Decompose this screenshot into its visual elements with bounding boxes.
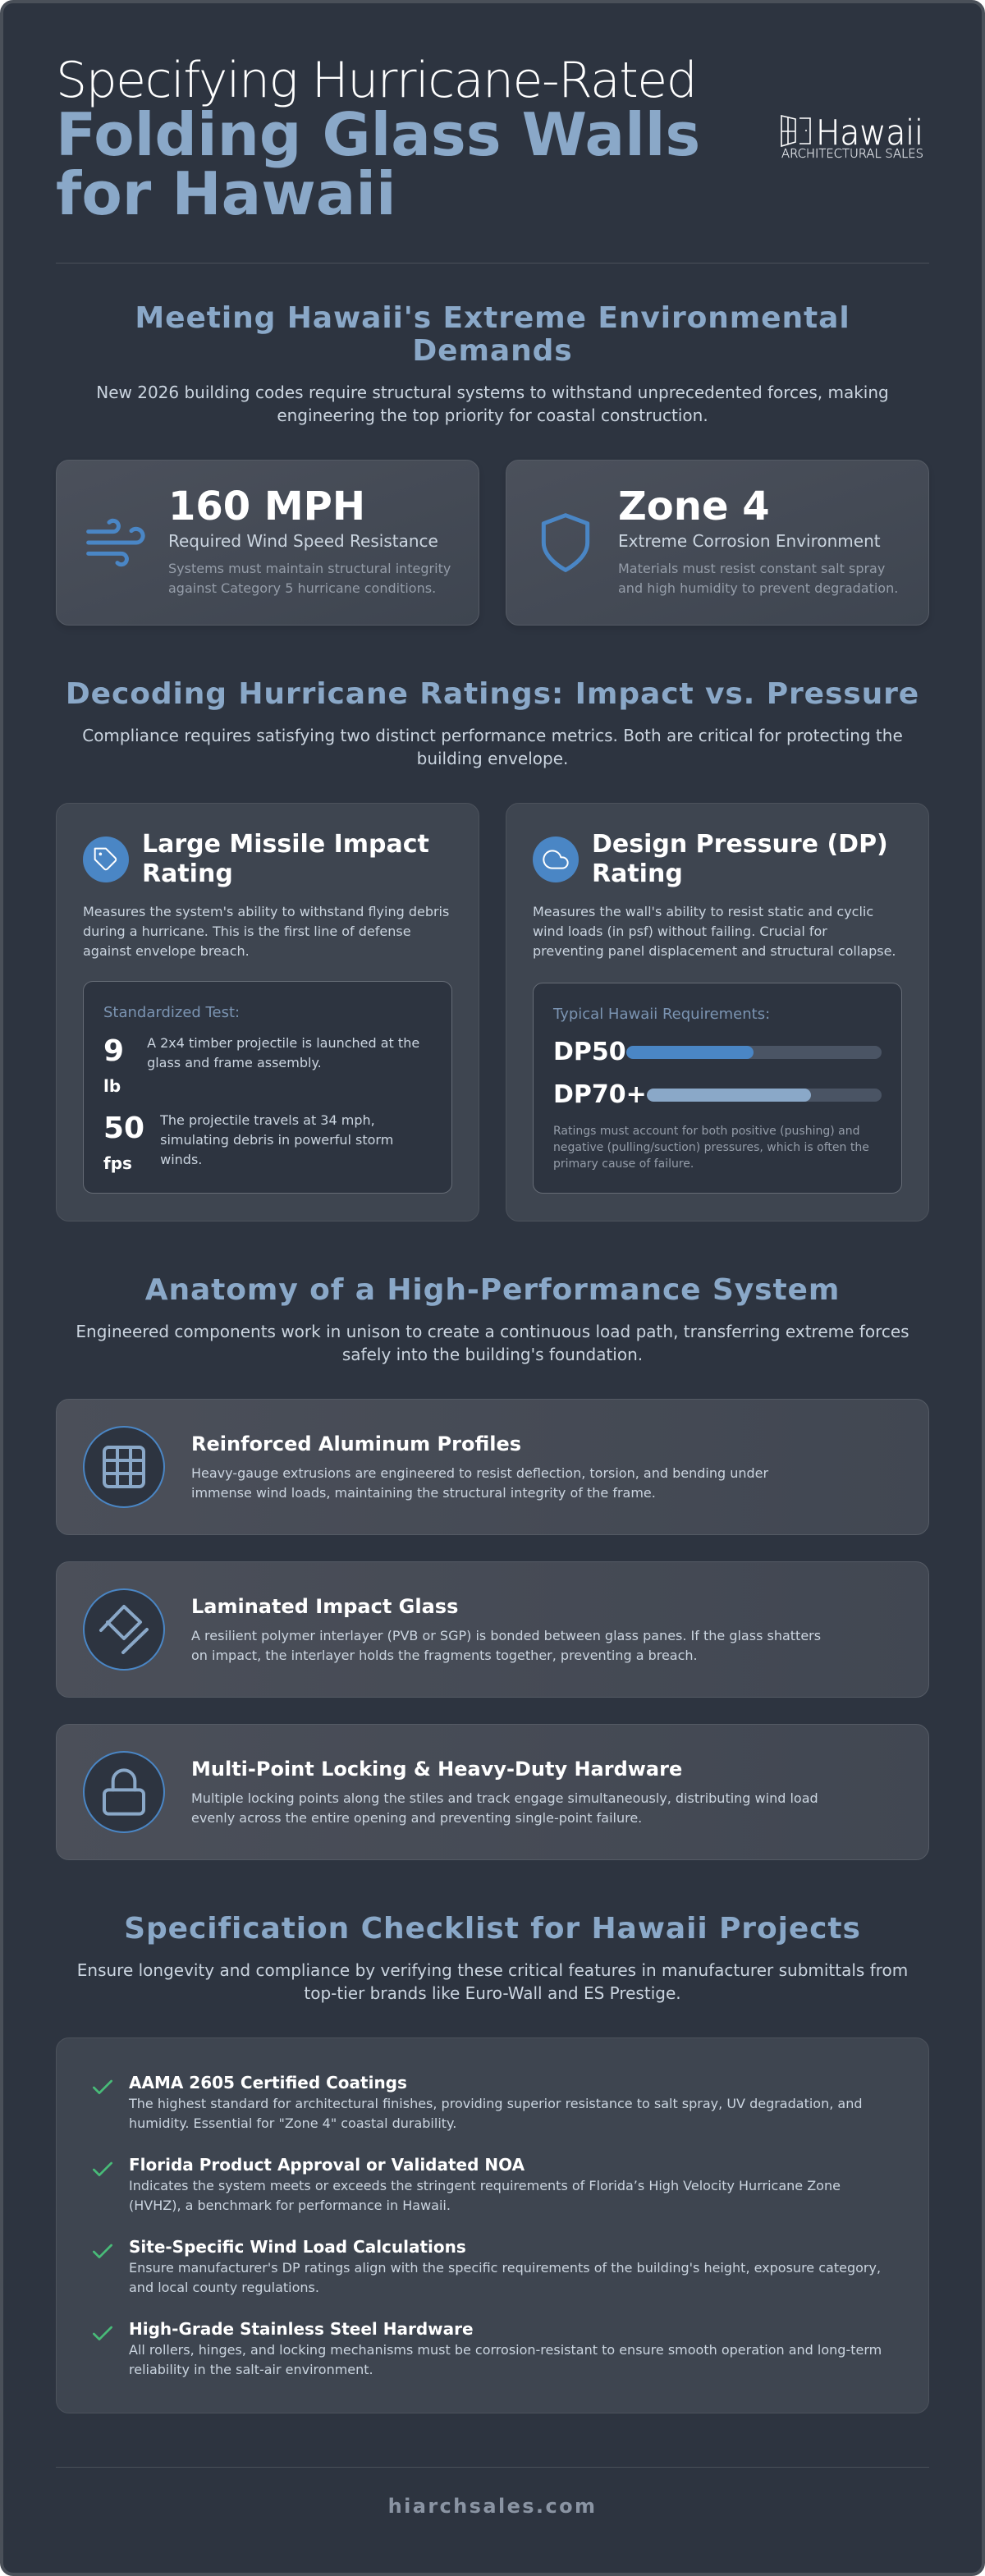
panel: aluminum profiles xyxy=(56,1399,929,1535)
section: anatomy xyxy=(56,1273,929,1860)
panel: Zone 4 xyxy=(506,460,929,626)
stat text: and high humidity to prevent degradation. xyxy=(618,580,898,596)
card heading: Rating xyxy=(142,859,233,888)
panel: 160 MPH xyxy=(56,460,479,626)
checklist item: coatings: AAMA 2605 Certified Coatings xyxy=(129,2073,407,2092)
stat: 9 lb: 9 xyxy=(103,1034,124,1068)
icon: wind xyxy=(86,519,145,566)
standardized test box xyxy=(83,981,452,1194)
heading: Demands xyxy=(412,334,573,368)
checklist item: hardware: reliability in the salt-air environment. xyxy=(129,2362,373,2377)
description: Measures the system's ability to withstand flying debris xyxy=(83,904,449,919)
intro text: New 2026 building codes require structural systems to withstand unprecedented forces, making xyxy=(96,383,889,402)
item text: Laminated Impact Glass xyxy=(191,1595,458,1618)
standardized test box: Standardized Test: xyxy=(103,1004,240,1021)
description: against envelope breach. xyxy=(83,943,250,959)
stat text: against Category 5 hurricane conditions. xyxy=(168,580,436,596)
item text xyxy=(191,1595,821,1663)
title xyxy=(56,52,700,228)
checklist item: coatings xyxy=(93,2073,862,2131)
stat text xyxy=(618,484,898,596)
panel: checklist xyxy=(56,2037,929,2413)
checklist item: coatings: humidity. Essential for "Zone 4" coastal durability. xyxy=(129,2115,456,2131)
bar: DP50 xyxy=(553,1038,882,1066)
item text: evenly across the entire opening and preventing single-point failure. xyxy=(191,1810,642,1826)
heading: Decoding Hurricane Ratings: Impact vs. Pressure xyxy=(66,677,919,711)
panel: locking hardware xyxy=(56,1724,929,1860)
intro text: engineering the top priority for coastal construction. xyxy=(277,406,708,425)
header xyxy=(56,52,923,228)
intro text xyxy=(77,1960,908,2003)
logo: Hawaii Architectural Sales: ARCHITECTURAL SALES xyxy=(781,146,923,161)
checklist item: wind load: and local county regulations. xyxy=(129,2280,319,2295)
stat: 9 lb: glass and frame assembly. xyxy=(147,1055,322,1070)
checklist item: hardware: All rollers, hinges, and locking mechanisms must be corrosion-resistant to ensure smooth operation and long-term xyxy=(129,2342,882,2358)
intro text: top-tier brands like Euro-Wall and ES Prestige. xyxy=(304,1983,681,2003)
item text: Multi-Point Locking & Heavy-Duty Hardware xyxy=(191,1758,682,1781)
heading: Specification Checklist for Hawaii Projects xyxy=(124,1912,861,1946)
stat text: Zone 4 xyxy=(618,484,770,529)
intro text: building envelope. xyxy=(417,749,568,768)
item text: A resilient polymer interlayer (PVB or SGP) is bonded between glass panes. If the glass shatters xyxy=(191,1628,821,1643)
stat text: 160 MPH xyxy=(168,484,365,529)
stat: 50 fps xyxy=(103,1112,393,1173)
heading xyxy=(135,301,850,368)
intro text xyxy=(82,726,903,768)
intro text: Ensure longevity and compliance by verifying these critical features in manufacturer submittals from xyxy=(77,1960,908,1980)
checklist item: coatings: The highest standard for architectural finishes, providing superior resistance to salt spray, UV degradation, and xyxy=(129,2096,862,2111)
item text: Reinforced Aluminum Profiles xyxy=(191,1432,521,1455)
intro text xyxy=(76,1322,909,1364)
requirements box: Typical Hawaii Requirements: xyxy=(553,1006,770,1023)
heading: Anatomy of a High-Performance System xyxy=(145,1273,840,1307)
item text: Multiple locking points along the stiles and track engage simultaneously, distributing wind load xyxy=(191,1790,818,1806)
item text: Heavy-gauge extrusions are engineered to resist deflection, torsion, and bending under xyxy=(191,1465,768,1481)
description: preventing panel displacement and structural collapse. xyxy=(533,943,896,959)
description xyxy=(83,904,449,959)
panel: design pressure xyxy=(506,803,929,1222)
checklist item: wind load: Ensure manufacturer's DP ratings align with the specific requirements of the building's height, exposure category, xyxy=(129,2260,881,2276)
heading: Meeting Hawaii's Extreme Environmental xyxy=(135,301,850,335)
checklist item: wind load: Site-Specific Wind Load Calculations xyxy=(129,2237,466,2257)
panel: large missile impact xyxy=(56,803,479,1222)
section: hurricane ratings xyxy=(56,677,929,1222)
footer website: hiarchsales.com xyxy=(388,2495,597,2518)
card heading: Large Missile Impact xyxy=(142,830,429,859)
note: Ratings must account for both positive (pushing) and xyxy=(553,1125,859,1138)
note: negative (pulling/suction) pressures, which is often the xyxy=(553,1141,869,1154)
title: Folding Glass Walls xyxy=(56,100,700,169)
checklist item: hardware: High-Grade Stainless Steel Hardware xyxy=(129,2319,474,2339)
card heading: Design Pressure (DP) xyxy=(592,830,888,859)
icon: cloud xyxy=(533,837,579,882)
intro text: Engineered components work in unison to create a continuous load path, transferring extreme forces xyxy=(76,1322,909,1341)
stat: 9 lb: A 2x4 timber projectile is launched at the xyxy=(147,1035,419,1051)
stat text xyxy=(168,484,451,596)
stat text: Systems must maintain structural integrity xyxy=(168,561,451,576)
section: environmental demands xyxy=(56,301,929,626)
note xyxy=(553,1125,869,1171)
description: Measures the wall's ability to resist static and cyclic xyxy=(533,904,873,919)
bar: DP50: DP50 xyxy=(553,1038,626,1066)
description: wind loads (in psf) without failing. Crucial for xyxy=(533,924,827,939)
description: during a hurricane. This is the first line of defense xyxy=(83,924,411,939)
description xyxy=(533,904,896,959)
checklist item: Florida approval: Indicates the system meets or exceeds the stringent requirements of Florida’s High Velocity Hurricane Zone xyxy=(129,2178,841,2193)
item text xyxy=(191,1432,768,1501)
icon: grid xyxy=(83,1426,165,1508)
stat: 9 lb xyxy=(103,1034,419,1096)
icon: tag xyxy=(83,837,129,882)
stat: 50 fps: simulating debris in powerful storm xyxy=(160,1132,393,1148)
item text: on impact, the interlayer holds the fragments together, preventing a breach. xyxy=(191,1648,698,1663)
note: primary cause of failure. xyxy=(553,1157,694,1171)
stat: 50 fps: fps xyxy=(103,1153,132,1173)
item text xyxy=(191,1758,818,1826)
bar: DP70+: DP70+ xyxy=(553,1080,647,1109)
section: checklist xyxy=(56,1912,929,2413)
rating cards xyxy=(56,803,929,1222)
stat: 50 fps: The projectile travels at 34 mph, xyxy=(160,1112,375,1128)
stat text: Materials must resist constant salt spray xyxy=(618,561,885,576)
stat: 50 fps: winds. xyxy=(160,1152,202,1167)
card heading xyxy=(83,830,429,888)
card heading xyxy=(533,830,888,888)
intro text: Compliance requires satisfying two distinct performance metrics. Both are critical for protecting the xyxy=(82,726,903,745)
requirements box xyxy=(533,983,902,1194)
panel: laminated glass xyxy=(56,1561,929,1698)
title: for Hawaii xyxy=(56,159,396,228)
title: Specifying Hurricane-Rated xyxy=(56,52,696,109)
bar: DP70+ xyxy=(553,1080,882,1109)
checklist item: Florida approval: (HVHZ), a benchmark for performance in Hawaii. xyxy=(129,2198,451,2213)
logo: Hawaii Architectural Sales xyxy=(781,113,923,161)
checklist item: hardware xyxy=(93,2319,882,2377)
intro text xyxy=(96,383,889,425)
checklist item: Florida approval: Florida Product Approval or Validated NOA xyxy=(129,2155,525,2175)
stat text: Required Wind Speed Resistance xyxy=(168,531,438,551)
stat: 9 lb: lb xyxy=(103,1076,121,1096)
icon: glass layers xyxy=(83,1588,165,1671)
stat cards xyxy=(56,460,929,626)
stat text: Extreme Corrosion Environment xyxy=(618,531,881,551)
checklist item: Florida approval xyxy=(93,2155,841,2213)
card heading: Rating xyxy=(592,859,683,888)
stat: 50 fps: 50 xyxy=(103,1112,144,1145)
item text: immense wind loads, maintaining the structural integrity of the frame. xyxy=(191,1485,656,1501)
intro text: safely into the building's foundation. xyxy=(342,1345,643,1364)
icon: shield xyxy=(542,513,589,572)
checklist item: wind load xyxy=(93,2237,881,2295)
icon: lock xyxy=(83,1751,165,1833)
